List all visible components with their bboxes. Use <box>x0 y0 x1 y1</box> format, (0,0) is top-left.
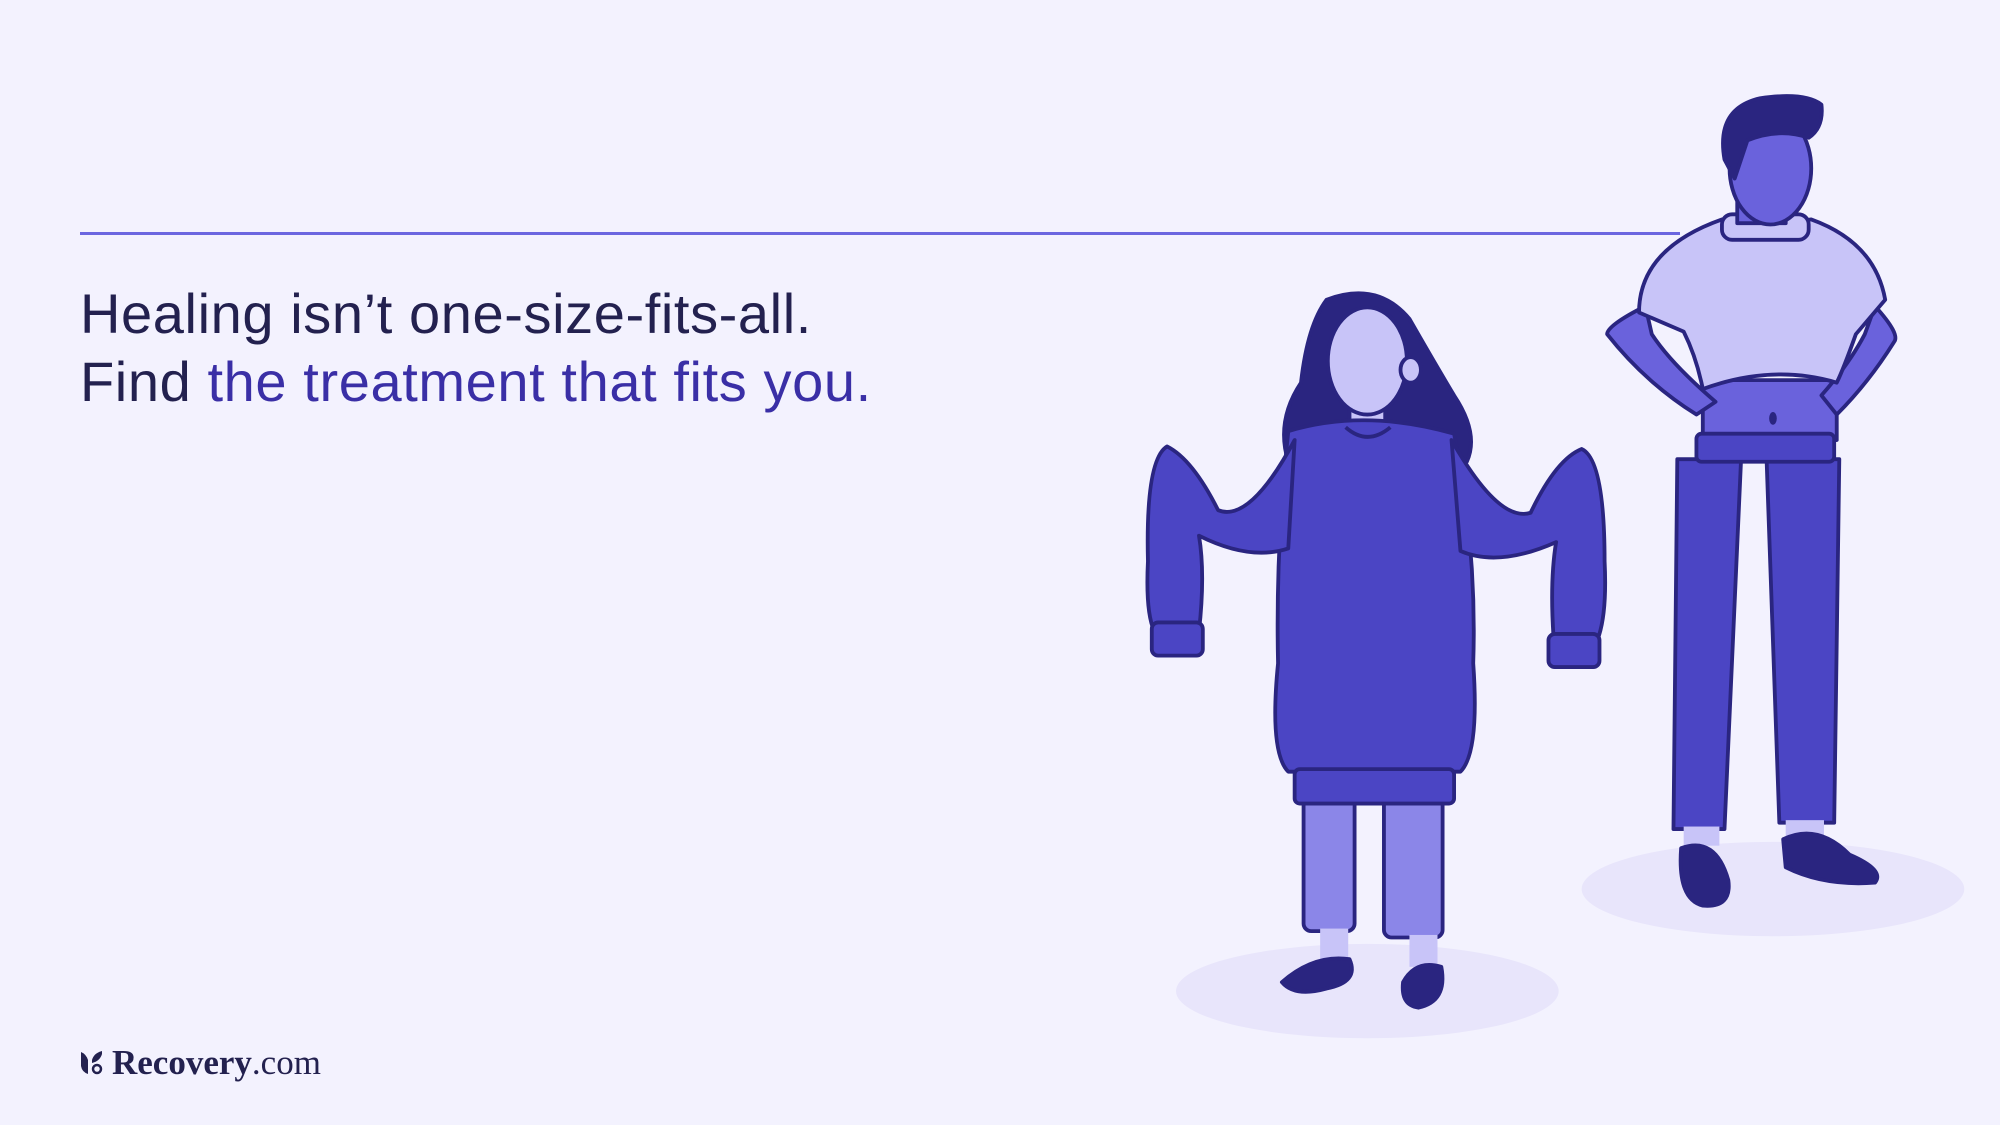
title: Find the treatment that fits you. <box>80 350 872 413</box>
icon: logo mark <box>81 1051 102 1074</box>
divider line <box>80 232 1680 235</box>
logo: Recovery.com <box>112 1043 321 1082</box>
title <box>80 282 872 413</box>
figure: woman in oversized sweater <box>1147 293 1605 1038</box>
title: Healing isn’t one-size-fits-all. <box>80 282 812 345</box>
figure: man in shrunken shirt <box>1582 96 1964 936</box>
